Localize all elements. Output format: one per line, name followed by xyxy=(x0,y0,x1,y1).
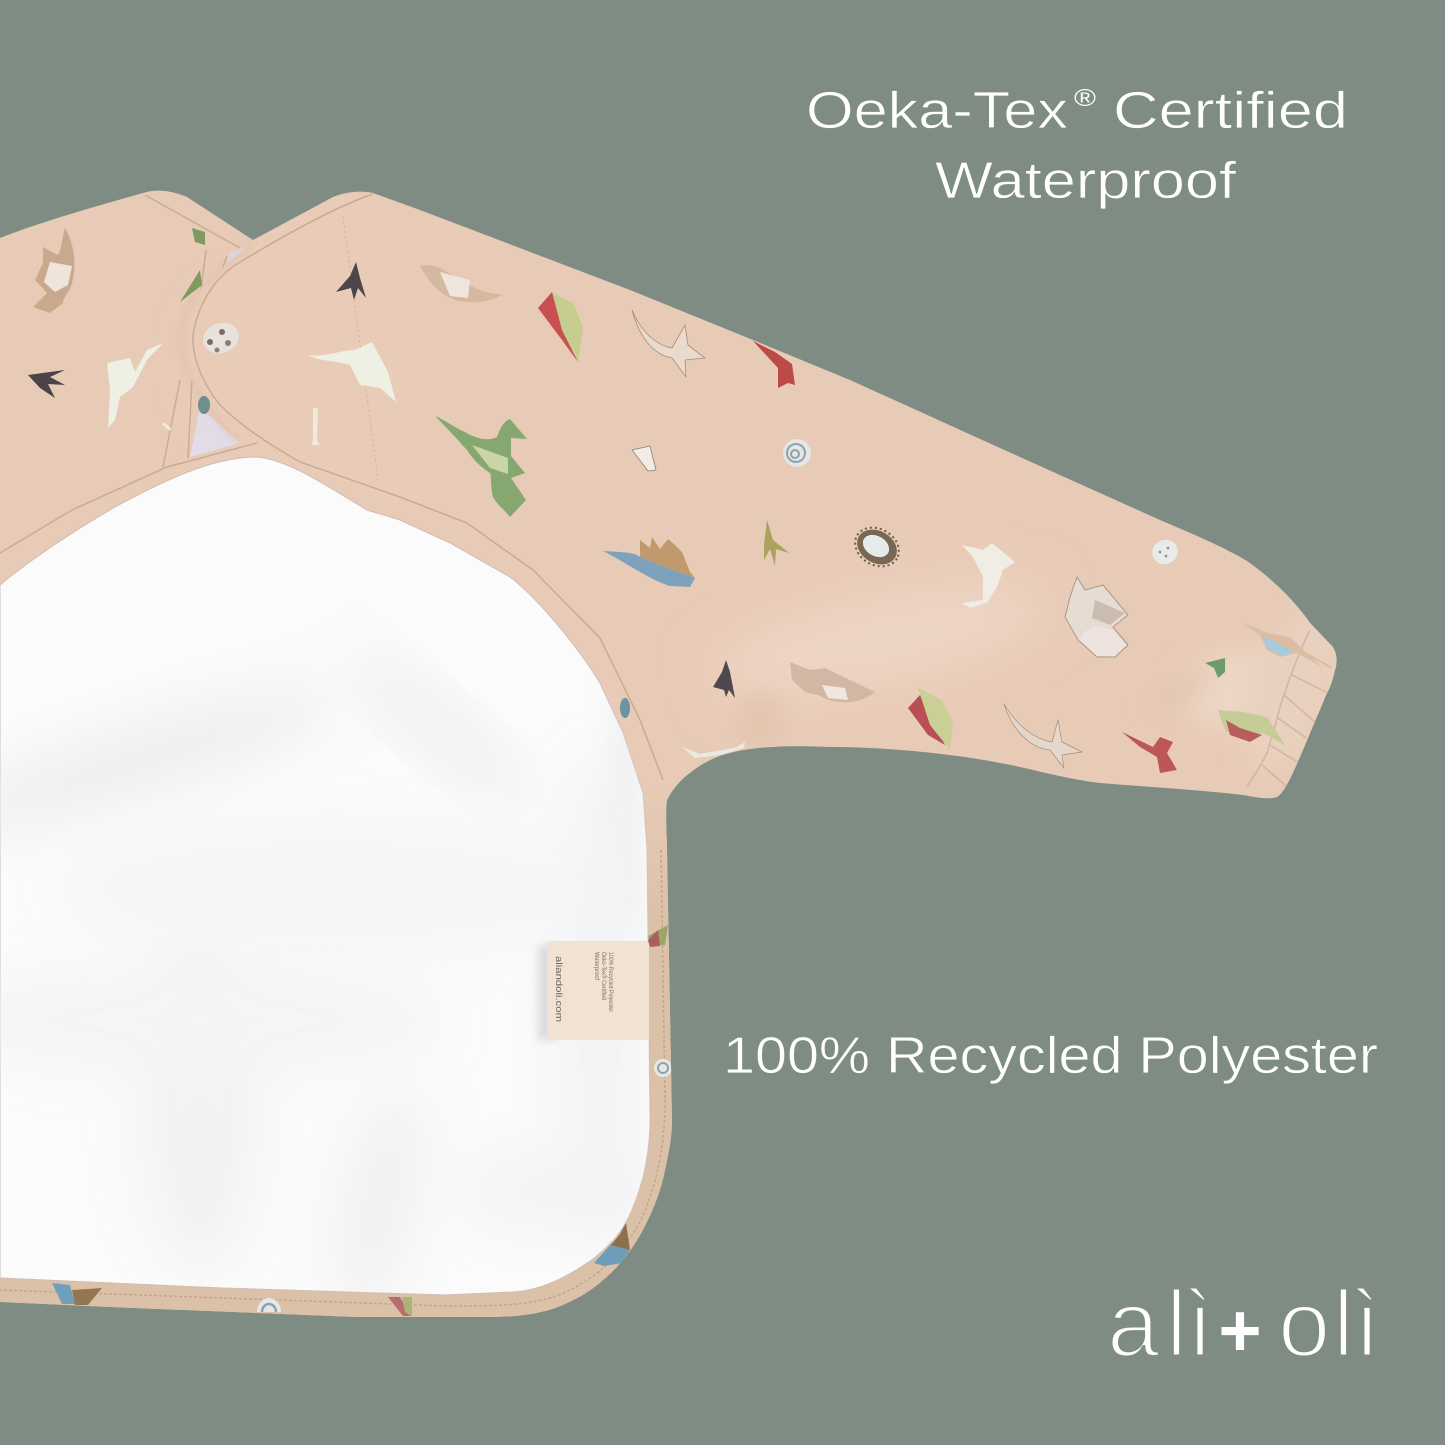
ammonite sleeve xyxy=(783,439,811,467)
dinosaur nest sleeve xyxy=(848,520,906,574)
footprint on strap xyxy=(336,262,366,300)
olive footprint sleeve xyxy=(764,520,789,566)
hem ammonite xyxy=(257,1298,281,1312)
logo: ali+oli: + xyxy=(1218,1289,1262,1372)
ankylosaur sleeve xyxy=(603,537,695,587)
label text right xyxy=(593,952,613,1012)
label text right: Oeko-Tex® Certified xyxy=(600,952,607,1000)
neck strap seam lines xyxy=(163,250,227,467)
blue fragment on seam xyxy=(620,698,630,718)
tan triceratops sleeve xyxy=(420,265,503,302)
sleeve seam stitches xyxy=(343,216,378,480)
white brachiosaur sleeve xyxy=(962,543,1015,608)
stegosaurus lower sleeve xyxy=(908,688,953,750)
footprint left strap xyxy=(28,370,65,398)
side binding dinosaur at tag xyxy=(648,925,668,947)
white dinosaur left strap xyxy=(107,343,163,428)
label text right: 100% Recycled Polyester xyxy=(607,952,613,1012)
heading: 100% Recycled Polyester: 100% Recycled Polyester xyxy=(723,1027,1378,1085)
dark footprint lower sleeve xyxy=(713,660,735,698)
lavender underlay of the neck opening xyxy=(190,246,250,457)
binding stitch lines xyxy=(0,194,665,1306)
care label shadow xyxy=(538,945,558,1040)
red dinosaur at cuff xyxy=(1122,732,1177,773)
triceratops left strap xyxy=(33,228,74,313)
spiral on side binding xyxy=(654,1059,672,1077)
sleeve fold shading xyxy=(0,508,1337,1317)
strap edge shadow xyxy=(181,243,253,443)
pale pterosaur sleeve xyxy=(632,310,705,377)
green dinosaur fragments xyxy=(180,228,205,302)
heading: Oeka-Tex Certified: Oeka-Tex xyxy=(806,82,1068,140)
heading: Oeka-Tex Certified: ® xyxy=(1074,85,1096,112)
green leaf at cuff xyxy=(1205,658,1225,678)
egg on strap xyxy=(199,318,243,358)
fossil skull sleeve xyxy=(632,446,656,471)
overlapping right strap xyxy=(192,197,333,443)
corner dinosaur xyxy=(594,1223,630,1266)
pale dinosaur tail near armpit xyxy=(682,742,745,758)
white dinosaur on strap xyxy=(308,342,396,402)
large grey triceratops sleeve xyxy=(1065,577,1128,657)
bone on strap xyxy=(312,408,320,445)
bib white inner lining xyxy=(0,457,650,1295)
care label tag xyxy=(547,941,649,1040)
hem stegosaur xyxy=(388,1297,412,1317)
logo: ali+oli: alì xyxy=(1107,1271,1213,1376)
blue fragment at strap xyxy=(198,396,210,414)
elastic cuff gathers xyxy=(1247,630,1332,787)
bone fragment xyxy=(162,422,171,431)
label text left: aliandoli.com xyxy=(553,956,564,1022)
hem blue dinosaur xyxy=(52,1283,102,1305)
heading: Oeka-Tex Certified: Certified xyxy=(1113,82,1348,140)
red stegosaurus sleeve xyxy=(538,292,583,362)
blue-bellied dinosaur at cuff xyxy=(1242,622,1322,667)
label text right: Waterproof xyxy=(593,952,599,980)
heading: Waterproof: Waterproof xyxy=(935,152,1237,210)
logo: ali+oli xyxy=(1107,1271,1380,1376)
green dinosaur sleeve xyxy=(435,416,527,517)
tan triceratops lower sleeve xyxy=(790,662,875,702)
green and red stegosaur at cuff xyxy=(1218,710,1285,745)
bib illustration xyxy=(0,191,1355,1330)
heading: Oeka-Tex Certified xyxy=(806,82,1348,140)
red dinosaur at sleeve top xyxy=(753,341,795,388)
pterosaur lower sleeve xyxy=(1004,704,1082,768)
bib peach outer fabric and sleeve xyxy=(0,191,1337,1317)
speckled egg sleeve xyxy=(1148,536,1182,568)
lining fold shading xyxy=(0,691,650,1294)
logo: ali+oli: olì xyxy=(1278,1271,1380,1376)
